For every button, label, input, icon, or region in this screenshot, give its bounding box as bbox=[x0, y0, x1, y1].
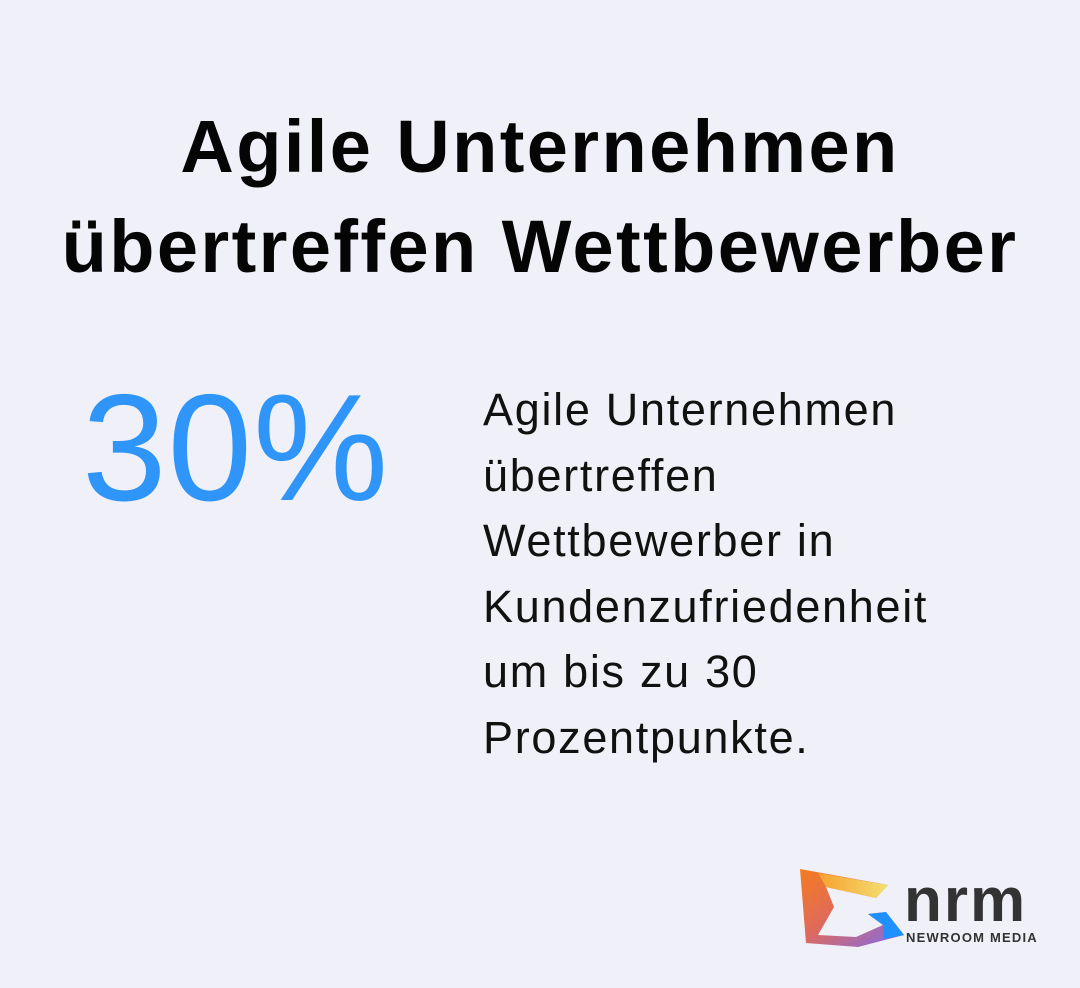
big number: 30% bbox=[82, 363, 389, 533]
description text: übertreffen bbox=[483, 450, 719, 500]
title bbox=[62, 105, 1018, 288]
title: Agile Unternehmen bbox=[180, 105, 900, 188]
logo: newroom media: NEWROOM MEDIA bbox=[906, 930, 1038, 945]
description text bbox=[483, 384, 928, 762]
description text: Wettbewerber in bbox=[483, 515, 835, 566]
description text: Prozentpunkte. bbox=[483, 712, 810, 762]
description text: Agile Unternehmen bbox=[483, 384, 897, 435]
logo: newroom media: nrm bbox=[904, 866, 1027, 935]
logo: newroom media bbox=[800, 866, 1038, 947]
description text: um bis zu 30 bbox=[483, 646, 759, 697]
description text: Kundenzufriedenheit bbox=[483, 580, 928, 632]
title: übertreffen Wettbewerber bbox=[62, 205, 1018, 288]
